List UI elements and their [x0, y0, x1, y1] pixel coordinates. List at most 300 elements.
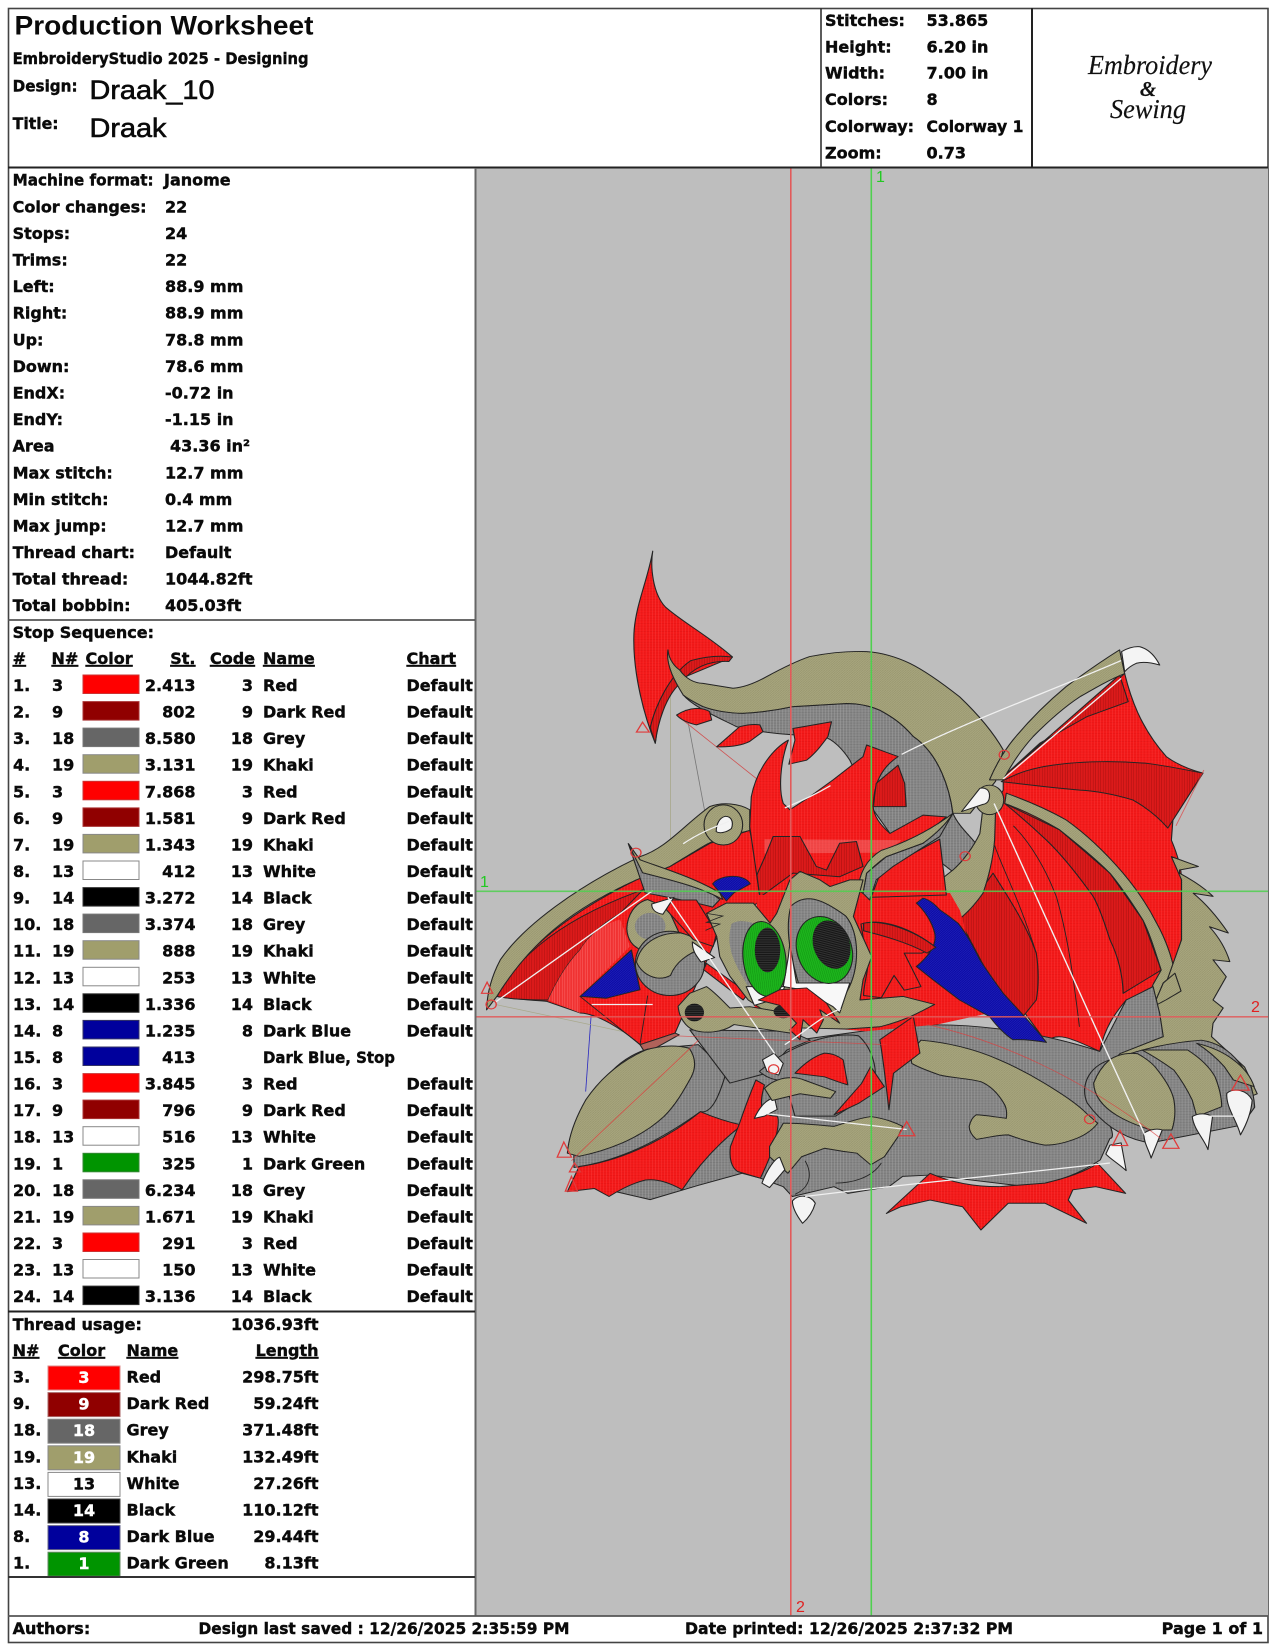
stop row 13: 13. [13, 995, 41, 1014]
header: design statistics: Colorway: [825, 117, 914, 136]
header: logo: & [1140, 77, 1157, 101]
right frill [861, 922, 936, 998]
panel: design properties: Stops: [13, 224, 70, 243]
thread row dark red [13, 1393, 319, 1417]
wing forearm [1005, 793, 1175, 1007]
guide threads behind [495, 683, 757, 1092]
white travel lines [495, 661, 1242, 1197]
red panel beside crest [871, 839, 946, 897]
stop row 24: 24. [13, 1287, 41, 1306]
panel: design properties [13, 171, 253, 615]
stop row 19: Dark Green [263, 1154, 365, 1173]
stop row 9 [13, 888, 473, 908]
left red foot [567, 1112, 742, 1197]
stop row 6: 6. [13, 809, 30, 828]
head crest [750, 740, 946, 897]
stop row 13 [13, 994, 473, 1014]
stop row 14: 1.235 [145, 1021, 196, 1040]
stop row 2: Default [406, 703, 473, 722]
stop row 16: Default [406, 1075, 473, 1094]
left eye [739, 920, 790, 998]
header: design statistics: Height: [825, 38, 892, 57]
dark lower panel left [960, 873, 1038, 1017]
stop row 24: Black [263, 1287, 312, 1306]
red cheek lower strip [704, 963, 748, 1000]
thread row dark blue: 8. [13, 1527, 30, 1546]
vertical green guide line [870, 168, 872, 1616]
stop row 17: 9 [52, 1101, 63, 1120]
snout grey [690, 1030, 810, 1083]
blue horn [916, 898, 1046, 1042]
stop row 4: Khaki [263, 756, 314, 775]
thread row dark blue [13, 1526, 319, 1550]
red cheek [666, 900, 717, 946]
panel: design properties: 88.9 mm [165, 277, 243, 296]
head [627, 813, 953, 1116]
thread table header [13, 1341, 318, 1360]
footer [13, 1619, 1263, 1638]
stop row 6: Default [406, 809, 473, 828]
round paw [635, 931, 705, 996]
stop row 19: 1 [52, 1154, 63, 1173]
stop row 10: Grey [263, 915, 306, 934]
thread row dark green: 8.13ft [264, 1554, 319, 1573]
stop row 20: 18 [52, 1181, 74, 1200]
stop row 1: 3 [242, 676, 253, 695]
panel: design properties: Area [13, 437, 55, 456]
guide labels: 1 [876, 169, 885, 186]
stop row 18: 18. [13, 1128, 41, 1147]
stop row 9: 3.272 [145, 889, 196, 908]
stop row 15: 8 [52, 1048, 63, 1067]
stop row 6: 9 [242, 809, 253, 828]
table header: Color [86, 649, 133, 668]
thread row dark red: 59.24ft [253, 1394, 319, 1413]
stop row 7: Default [406, 835, 473, 854]
thread row white: 13. [13, 1474, 41, 1493]
thigh grey rim [574, 1045, 726, 1167]
stop row 13: Black [263, 995, 312, 1014]
base red behind head [754, 893, 988, 1031]
red triangles [482, 722, 1249, 1191]
panel: design properties: 78.8 mm [165, 330, 243, 349]
stop row 23: 13 [52, 1260, 74, 1280]
stop row 9: 14 [52, 889, 74, 908]
right eye [788, 911, 860, 989]
subtitle: EmbroideryStudio 2025 - Designing [13, 49, 309, 68]
red arm [730, 1080, 778, 1178]
stop row 12: 13 [231, 968, 253, 987]
panel: stop sequence table [13, 623, 473, 1306]
wing knuckle [704, 805, 743, 845]
header: design statistics: 6.20 in [926, 38, 988, 57]
stop row 14: 8 [52, 1021, 63, 1040]
jaw khaki lip [764, 1078, 836, 1100]
toe 1 [1094, 1053, 1175, 1130]
header: design statistics: Zoom: [825, 144, 882, 163]
stop row 7: 19 [52, 835, 74, 854]
stop row 23: White [263, 1260, 316, 1280]
stop row 11: 19 [231, 942, 253, 961]
pale stitched band [764, 839, 902, 854]
joint claw [962, 788, 990, 812]
guide labels: 2 [1251, 999, 1260, 1016]
panel: design properties: Max stitch: [13, 463, 113, 482]
back fur [1102, 857, 1257, 1121]
stop row 15: 15. [13, 1048, 41, 1067]
thread row khaki [13, 1446, 319, 1470]
stop row 4: Default [406, 756, 473, 775]
vertical red guide line [790, 168, 792, 1616]
stop row 6: Dark Red [263, 809, 346, 828]
stop row 14: 14. [13, 1021, 41, 1040]
panel: design properties: 405.03ft [165, 596, 242, 615]
panel: design properties: -0.72 in [165, 384, 234, 402]
stop row 8: 412 [162, 862, 196, 881]
stop row 13: 1.336 [145, 995, 196, 1014]
stop row 24: 3.136 [145, 1287, 196, 1306]
preview panel background [476, 168, 1268, 1616]
thread row black: 110.12ft [242, 1500, 319, 1520]
header: design statistics: 53.865 [926, 11, 988, 30]
stop row 20: Default [406, 1181, 473, 1200]
stop row 2: 802 [162, 703, 196, 722]
stop row 21: 19 [52, 1207, 74, 1226]
stop row 6 [13, 808, 473, 828]
stop row 21: Default [406, 1207, 473, 1226]
header: design statistics: Colors: [825, 90, 888, 109]
panel: thread usage table [13, 1315, 319, 1576]
thread row red: 3 [78, 1368, 90, 1387]
thread row dark red: 9 [78, 1395, 90, 1414]
stop row 7: 7. [13, 835, 30, 854]
paw grey base [1085, 1040, 1255, 1143]
thread row grey: 18 [73, 1421, 95, 1440]
stop row 22: Red [263, 1234, 298, 1253]
header: design statistics: 7.00 in [926, 64, 988, 83]
stop row 18: 516 [162, 1128, 196, 1147]
stop row 1: 2.413 [145, 676, 196, 695]
stop row 10: Default [406, 915, 473, 934]
panel: design properties: Up: [13, 330, 43, 349]
stop row 9: Default [406, 889, 473, 908]
thigh khaki [567, 1046, 695, 1156]
crest D panel [873, 765, 906, 807]
stop row 6: 1.581 [145, 809, 196, 828]
panel: design properties: Total thread: [13, 570, 128, 589]
header: logo [1087, 50, 1212, 124]
red alignment lines [571, 770, 1204, 1161]
stop row 12: 253 [162, 968, 196, 987]
panel: design properties: -1.15 in [165, 410, 234, 429]
stop row 9: 9. [13, 889, 30, 908]
stop row 3 [13, 728, 473, 748]
stop row 3: Grey [263, 729, 306, 748]
thread row dark red: Dark Red [126, 1394, 209, 1413]
stop row 5: 7.868 [145, 782, 196, 801]
panel: design properties: Min stitch: [13, 490, 109, 509]
stop row 20: 18 [231, 1181, 253, 1200]
left socket [729, 921, 758, 989]
stop row 16: 3 [242, 1075, 253, 1094]
thread table header: Name [126, 1341, 178, 1360]
knuckle claw [716, 816, 732, 833]
stop row 12: White [263, 968, 316, 987]
thread row grey [13, 1419, 319, 1443]
stop row 8: White [263, 862, 316, 881]
wing tip over fur [1153, 973, 1181, 1007]
hand claws [652, 897, 674, 914]
table header: # [13, 649, 26, 668]
dragon embroidery design [482, 551, 1257, 1230]
stop row 18 [13, 1127, 473, 1147]
stop row 17: Default [406, 1101, 473, 1120]
thread row grey: 371.48ft [242, 1421, 319, 1440]
stop row 10: 10. [13, 915, 41, 934]
stop row 17: 796 [162, 1101, 196, 1120]
stop row 15: Dark Blue, Stop [263, 1048, 395, 1067]
title label: Title: [13, 114, 59, 133]
panel: design properties: 22 [165, 250, 187, 270]
stop row 19: Default [406, 1154, 473, 1173]
tail khaki top [668, 650, 1003, 813]
stop row 5: 3 [242, 782, 253, 801]
stop row 21: 1.671 [145, 1207, 196, 1226]
left wing membrane [497, 830, 764, 1045]
stop row 24: 14 [52, 1287, 74, 1306]
title: Production Worksheet [14, 10, 314, 40]
panel: design properties: Default [165, 543, 232, 562]
stop row 4: 3.131 [145, 756, 196, 775]
stop row 10: 18 [231, 915, 253, 934]
header: design statistics: 0.73 [926, 144, 966, 163]
stop row 17: 17. [13, 1101, 41, 1120]
stop row 1: 1. [13, 676, 30, 695]
stop row 22: Default [406, 1234, 473, 1253]
thread row dark blue: Dark Blue [126, 1527, 215, 1546]
wing joint [975, 785, 1004, 815]
guide labels: 1 [480, 874, 489, 891]
stop row 16: 3.845 [145, 1075, 196, 1094]
stop sequence heading: Stop Sequence: [13, 623, 154, 642]
stop row 1: 3 [52, 676, 63, 695]
dark panel under forearm [1005, 803, 1161, 993]
upper wing arm [990, 650, 1125, 780]
head fur [707, 871, 935, 1029]
dark red arches [757, 837, 863, 897]
red circles [486, 750, 1095, 1124]
thread row dark blue: 8 [78, 1528, 90, 1547]
right red foot [886, 1163, 1126, 1230]
thread row dark green: Dark Green [126, 1554, 229, 1573]
wing arm downward [930, 808, 996, 920]
panel: design properties: Total bobbin: [13, 596, 131, 615]
panel: design properties: 12.7 mm [165, 516, 243, 536]
stop row 8: 13 [52, 862, 74, 881]
stop row 10: 3.374 [145, 915, 196, 934]
stop row 22: 22. [13, 1234, 41, 1253]
stop row 5: 3 [52, 782, 63, 801]
dark top panel [1003, 675, 1128, 777]
stop row 2: 2. [13, 703, 30, 722]
header: logo: Sewing [1110, 94, 1186, 124]
stop row 8: 13 [231, 862, 253, 881]
stop row 13: 14 [231, 995, 253, 1014]
horizontal red guide line [476, 1016, 1268, 1018]
tail spade [634, 551, 732, 743]
stop row 1 [13, 675, 473, 695]
stop row 4: 19 [52, 756, 74, 775]
upper knuckle [627, 900, 683, 951]
round paw khaki [636, 933, 703, 978]
stop row 14: 8 [242, 1021, 253, 1040]
stop row 20: 6.234 [145, 1181, 196, 1200]
stop row 20: 20. [13, 1181, 41, 1200]
panel: design properties: Thread chart: [13, 543, 135, 562]
thread row grey: Grey [126, 1421, 169, 1440]
stop row 21: 19 [231, 1207, 253, 1226]
header: logo: Embroidery [1087, 50, 1212, 80]
stop row 24: Default [406, 1287, 473, 1306]
stop row 8 [13, 861, 473, 881]
thread row black: 14. [13, 1500, 41, 1520]
design name: Draak_10 [90, 75, 214, 105]
table header: St. [170, 649, 196, 668]
stop row 22: 3 [242, 1234, 253, 1253]
right wing [930, 647, 1203, 1051]
stop row 18: Default [406, 1128, 473, 1147]
table header: Chart [406, 649, 456, 668]
stop row 18: White [263, 1128, 316, 1147]
toe 2 [1142, 1050, 1222, 1117]
guide labels: 2 [796, 1599, 805, 1616]
stop row 4: 19 [231, 756, 253, 775]
table header [13, 649, 456, 668]
panel: design properties: 43.36 in² [170, 437, 250, 456]
stop row 6: 9 [52, 809, 63, 828]
header: design statistics: Width: [825, 64, 885, 83]
thread row black [13, 1499, 319, 1523]
thread row red: 3. [13, 1368, 30, 1386]
stop row 12: 13 [52, 968, 74, 987]
stop row 17 [13, 1100, 473, 1120]
stop row 7 [13, 834, 473, 854]
stop row 24 [13, 1286, 473, 1306]
table header: Name [263, 649, 315, 668]
stop row 5: 5. [13, 782, 30, 801]
stop row 1: Red [263, 676, 298, 695]
thread row dark blue: 29.44ft [253, 1527, 319, 1546]
panel: design properties: Down: [13, 357, 69, 376]
stop row 22: 291 [162, 1234, 196, 1253]
thread row black: Black [126, 1500, 175, 1520]
stop row 16: Red [263, 1075, 298, 1094]
stop row 22: 3 [52, 1234, 63, 1253]
date printed: Date printed: 12/26/2025 2:37:32 PM [685, 1619, 1013, 1638]
panel: design properties: Left: [13, 277, 55, 296]
stop row 14: Dark Blue [263, 1021, 351, 1040]
right socket [788, 899, 857, 992]
dark fan panel [1001, 762, 1203, 828]
left hand [627, 900, 705, 996]
dark outer membrane [497, 890, 643, 1000]
stop row 11 [13, 941, 473, 961]
header: design statistics: 8 [926, 90, 938, 109]
stop row 3: 8.580 [145, 729, 196, 748]
stop row 3: 3. [13, 729, 30, 748]
red nose [758, 988, 840, 1040]
stop row 17: Dark Red [263, 1101, 346, 1120]
thread usage total: 1036.93ft [231, 1315, 319, 1334]
left wing arm [487, 804, 750, 1010]
tail underside grey [683, 695, 980, 879]
panel: design properties: 0.4 mm [165, 490, 232, 509]
header: design statistics [825, 11, 1024, 163]
stop row 2: 9 [52, 703, 63, 722]
panel: design properties: EndX: [13, 384, 65, 402]
snout top [678, 987, 798, 1033]
stop row 2: Dark Red [263, 703, 346, 722]
stop row 5: Red [263, 782, 298, 801]
thread table header: Color [58, 1341, 105, 1360]
left wing [487, 804, 764, 1054]
thread row grey: 18. [13, 1421, 41, 1440]
stop row 4 [13, 755, 473, 775]
panel: design properties: Trims: [13, 250, 68, 270]
thread row red [13, 1366, 319, 1390]
thread row dark green: 1 [78, 1554, 90, 1573]
stop row 21 [13, 1206, 473, 1226]
thread row dark red: 9. [13, 1394, 30, 1413]
stop row 11: 19 [52, 942, 74, 961]
stop row 11: 888 [162, 942, 196, 961]
thread table header: Length [256, 1341, 318, 1360]
stop row 17: 9 [242, 1101, 253, 1120]
stop row 19: 1 [242, 1154, 253, 1173]
panel: design properties: 1044.82ft [165, 570, 253, 589]
blue wing spike [580, 950, 640, 998]
stop row 15 [13, 1047, 395, 1067]
table header: Code [210, 649, 255, 668]
stop row 14 [13, 1020, 473, 1040]
thread row khaki: 19. [13, 1447, 41, 1466]
lower jaw grey [759, 1035, 875, 1116]
thread row khaki: Khaki [126, 1447, 177, 1466]
claws [754, 1090, 1252, 1223]
thread row red: 298.75ft [242, 1368, 319, 1386]
stop row 11: Default [406, 942, 473, 961]
right hind paw [1085, 1040, 1255, 1143]
page number: Page 1 of 1 [1162, 1619, 1263, 1638]
thread table header: N# [13, 1341, 39, 1360]
authors: Authors: [13, 1619, 90, 1638]
table header: N# [52, 649, 78, 668]
stop row 12 [13, 967, 473, 987]
stop row 23: 23. [13, 1260, 41, 1280]
panel: design properties: Color changes: [13, 197, 147, 216]
stop row 20 [13, 1180, 473, 1200]
stitch guide overlay [482, 661, 1249, 1197]
thread row dark green: 1. [13, 1554, 30, 1573]
stop row 19: 325 [162, 1154, 196, 1173]
left horn [628, 844, 720, 907]
wing seam band [640, 1033, 679, 1054]
stop row 7: 1.343 [145, 835, 196, 854]
left thigh [567, 1045, 726, 1167]
panel: design properties: 78.6 mm [165, 357, 243, 376]
white of eyes [783, 943, 850, 1013]
stop row 3: 18 [52, 729, 74, 748]
